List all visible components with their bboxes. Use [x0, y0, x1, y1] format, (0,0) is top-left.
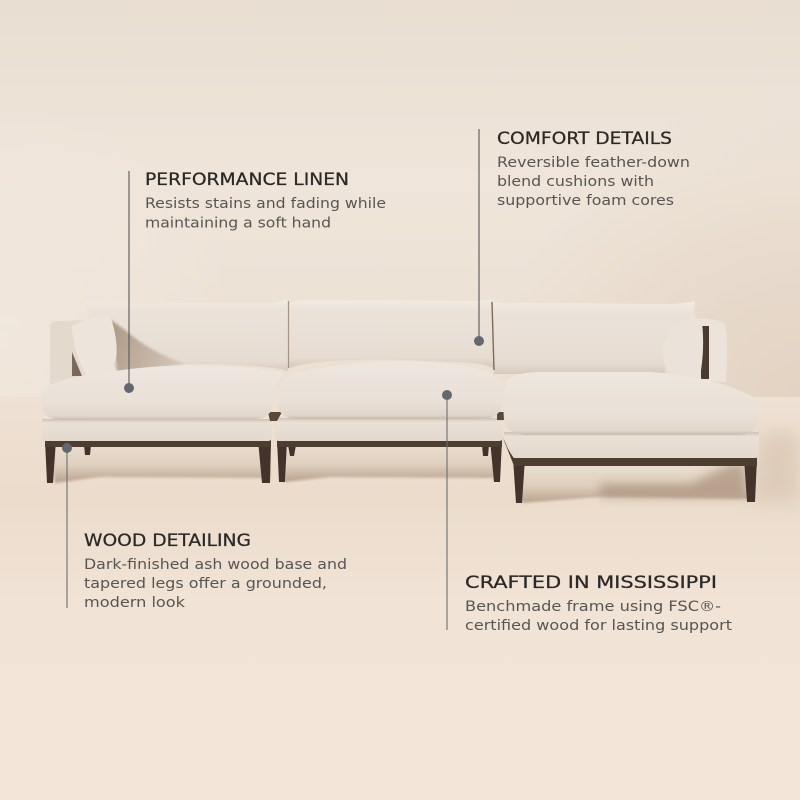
cushion gaps [288, 301, 494, 370]
seat cushion: chaise [503, 372, 760, 435]
leader line [446, 395, 448, 630]
right arm [695, 319, 727, 382]
base upholstery [42, 419, 272, 441]
leader line [128, 171, 130, 388]
description: certified wood for lasting support [465, 618, 732, 634]
description: modern look [84, 595, 186, 611]
marker dot [474, 336, 484, 346]
marker dot [62, 443, 72, 453]
marker dot [442, 390, 452, 400]
sofa illustration [41, 299, 800, 503]
throw pillow: right [663, 319, 703, 379]
legs [45, 440, 757, 503]
heading: PERFORMANCE LINEN [145, 170, 349, 189]
callout: wood detailing [62, 443, 347, 611]
description: Benchmade frame using FSC®- [465, 599, 721, 615]
heading: WOOD DETAILING [84, 531, 251, 550]
floor shadows [50, 432, 800, 503]
wood rails [45, 438, 757, 466]
shadow behind left pillow [108, 318, 185, 373]
description: blend cushions with [497, 174, 654, 190]
seat cushion: left [41, 365, 283, 420]
throw pillow: left [72, 315, 117, 377]
seat cushion: middle [276, 361, 505, 419]
description: Resists stains and fading while [145, 196, 386, 212]
back cushion: left [86, 299, 288, 372]
dark gap behind left pillow [72, 352, 82, 376]
left arm [50, 320, 88, 386]
leader line [66, 448, 68, 608]
marker dot [124, 383, 134, 393]
description: Reversible feather-down [497, 155, 690, 171]
heading: CRAFTED IN MISSISSIPPI [465, 573, 717, 592]
description: supportive foam cores [497, 193, 674, 209]
leader line [478, 129, 480, 341]
back cushion: middle [289, 299, 493, 368]
callout: crafted in mississippi [442, 390, 732, 634]
description: Dark-finished ash wood base and [84, 557, 347, 573]
gap between right pillow and arm [701, 326, 709, 379]
callout: comfort details [474, 129, 690, 346]
heading: COMFORT DETAILS [497, 129, 672, 148]
dark wedges between seats [268, 412, 282, 421]
callout: performance linen [124, 170, 386, 393]
back cushion: right [493, 301, 696, 374]
description: maintaining a soft hand [145, 216, 331, 232]
description: tapered legs offer a grounded, [84, 576, 327, 592]
